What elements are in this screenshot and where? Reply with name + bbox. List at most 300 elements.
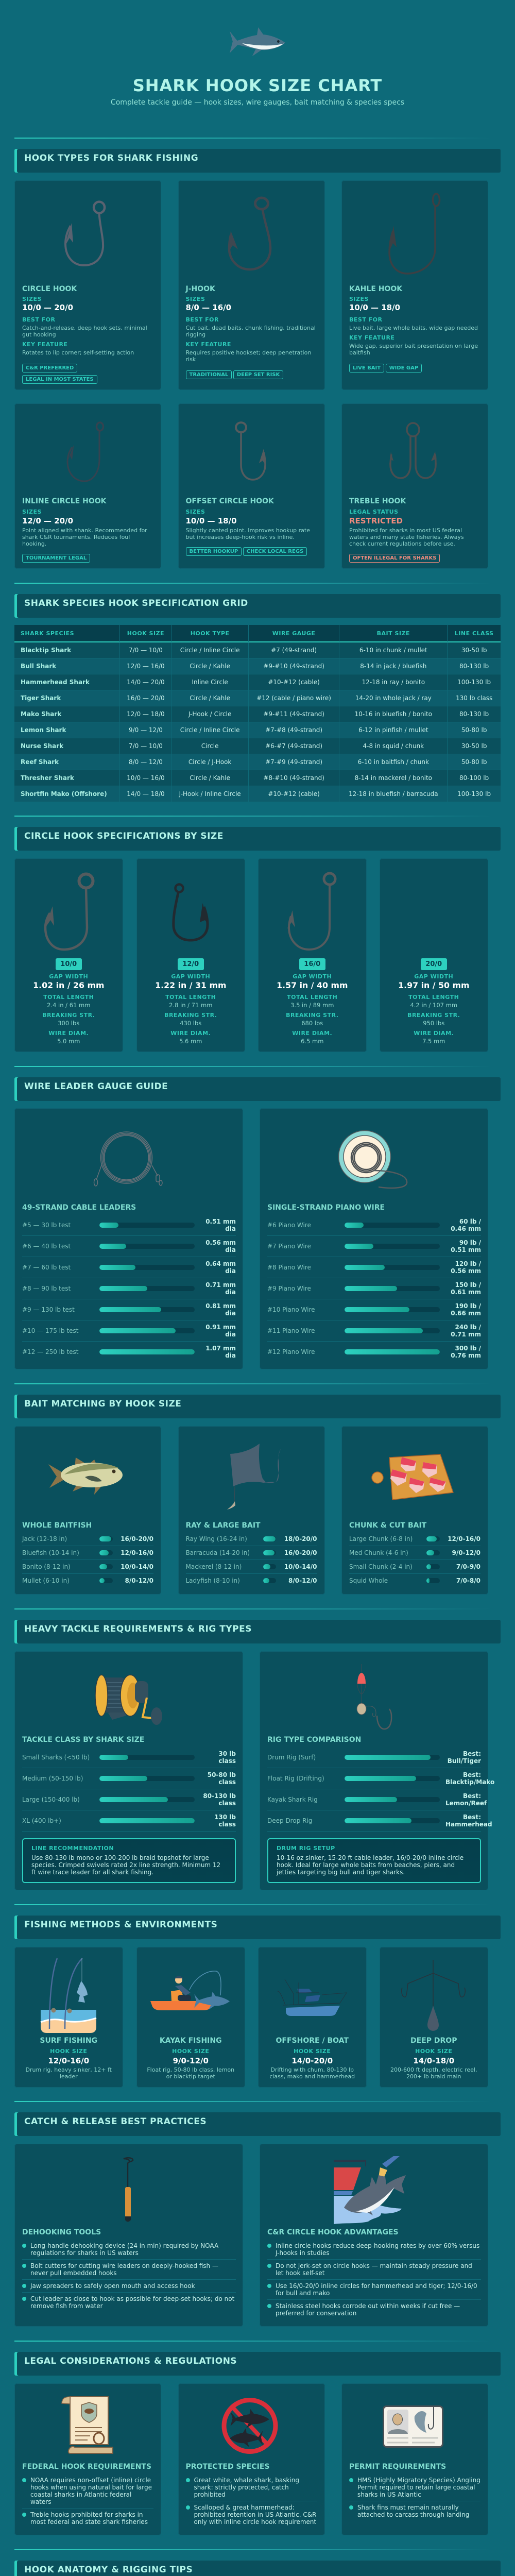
tags: C&R PREFERRED xyxy=(26,365,74,371)
list: Shark fins must remain naturally xyxy=(357,2504,459,2511)
heading: circle hook specs xyxy=(14,827,501,851)
table: species hook specs: Circle / Inline Circle xyxy=(180,726,239,734)
chart: piano wire gauges: #6 Piano Wire xyxy=(267,1221,311,1228)
panel: offshore boat: Drifting with chum, 80-130 lb xyxy=(270,2066,354,2073)
icon: cable coil xyxy=(94,1131,163,1187)
table: species hook specs: #9-#11 (49-strand) xyxy=(263,710,324,718)
panel: deep drop: 200-600 ft depth, electric reel, xyxy=(390,2066,477,2073)
list: most federal and state shark fisheries xyxy=(30,2518,148,2526)
specs: GAP WIDTH xyxy=(414,973,453,980)
panel: piano wire xyxy=(260,1108,488,1369)
specs: GAP WIDTH xyxy=(171,973,210,980)
list: Scalloped & great hammerhead: xyxy=(194,2504,295,2511)
chart: rig comparison: Best: Hammerhead xyxy=(445,1814,492,1828)
panel: chunk and cut bait xyxy=(341,1426,488,1595)
specs: HOOK SIZE xyxy=(294,2048,331,2055)
chart: baitfish sizes: Jack (12-18 in) xyxy=(22,1535,67,1543)
specs: SIZES xyxy=(22,509,42,515)
panel: circle hook: Rotates to lip corner; self-setting action xyxy=(22,349,134,356)
panel: 20/0: TOTAL LENGTH xyxy=(408,994,459,1001)
chart: large bait sizes: 18/0-20/0 xyxy=(284,1535,317,1543)
chart: baitfish sizes: Bonito (8-12 in) xyxy=(22,1563,71,1570)
chart: rig comparison: Deep Drop Rig xyxy=(267,1817,312,1824)
chart: rig comparison: Best: Lemon/Reef xyxy=(445,1792,487,1807)
heading: heavy tackle xyxy=(14,1620,501,1643)
panel: circle hook: KEY FEATURE xyxy=(22,341,67,348)
table: species hook specs: Lemon Shark xyxy=(21,726,66,734)
list: NOAA requires non-offset (inline) circle xyxy=(30,2477,151,2484)
callout: line recommendation: species. Crimped swivels rated 2x line strength. Minimum 12 xyxy=(31,1861,220,1869)
tags xyxy=(186,370,283,379)
table: species hook specs: Thresher Shark xyxy=(21,774,74,782)
panel: inline circle hook xyxy=(14,403,161,569)
heading: TACKLE CLASS BY SHARK SIZE xyxy=(22,1736,144,1744)
panel: 12/0: TOTAL LENGTH xyxy=(165,994,216,1001)
icon: deep drop rig xyxy=(401,1960,466,2031)
table: species hook specs: 7/0 — 10/0 xyxy=(129,647,163,654)
table: species hook specs: 9/0 — 12/0 xyxy=(129,726,163,734)
chart: tackle class: 130 lb class xyxy=(214,1814,236,1828)
panel: dehooking tools xyxy=(14,2144,243,2327)
chart: cable gauges: 0.91 mm dia xyxy=(205,1324,236,1338)
chart: large bait sizes: Ladyfish (8-10 in) xyxy=(185,1577,240,1584)
chart: tackle class: Small Sharks (<50 lb) xyxy=(22,1754,90,1761)
heading: hook types: HOOK TYPES FOR SHARK FISHING xyxy=(24,153,198,163)
callout: drum rig setup: 10-16 oz sinker, 15-20 ft cable leader, 16/0-20/0 inline circle xyxy=(277,1854,464,1861)
icon: j-hook xyxy=(228,197,272,271)
panel: 10/0: 2.4 in / 61 mm xyxy=(47,1002,90,1009)
specs: SIZES xyxy=(349,296,369,302)
list: J-hooks in studies xyxy=(276,2249,330,2257)
callout: drum rig setup xyxy=(267,1838,481,1883)
tags: BETTER HOOKUP xyxy=(190,549,238,554)
panel: 12/0: 2.8 in / 71 mm xyxy=(169,1002,212,1009)
chart: tackle class xyxy=(22,1750,236,1832)
chart: piano wire gauges: 300 lb / 0.76 mm xyxy=(451,1345,481,1359)
heading: TREBLE HOOK xyxy=(349,497,406,505)
icon: offset circle hook xyxy=(235,421,266,481)
list xyxy=(267,2240,481,2319)
table: species hook specs: 8/0 — 12/0 xyxy=(129,758,163,766)
table: species hook specs: 50-80 lb xyxy=(461,758,487,766)
heading: fishing methods xyxy=(14,1916,501,1939)
panel: deep drop xyxy=(380,1947,488,2088)
table: species hook specs: Inline Circle xyxy=(192,679,228,686)
heading: CHUNK & CUT BAIT xyxy=(349,1521,426,1530)
table: species hook specs: 100-130 lb xyxy=(457,790,491,798)
heading: catch and release xyxy=(14,2112,501,2136)
list: preferred for conservation xyxy=(276,2310,356,2317)
panel: offset circle hook xyxy=(178,403,324,569)
panel: federal hook requirements xyxy=(14,2383,161,2535)
chart: cable gauges xyxy=(22,1218,236,1359)
heading: FEDERAL HOOK REQUIREMENTS xyxy=(22,2463,151,2471)
chart: cable gauges: #10 — 175 lb test xyxy=(22,1327,78,1334)
specs: SIZES xyxy=(185,296,205,302)
table: species hook specs: J-Hook / Circle xyxy=(188,710,231,718)
icon: kahle hook xyxy=(388,193,441,275)
callout: drum rig setup: hook. Ideal for large whole baits from beaches, piers, and xyxy=(277,1861,455,1869)
table: species hook specs: 6-10 in baitfish / chunk xyxy=(358,758,429,766)
heading: anatomy and rigging: HOOK ANATOMY & RIGGING TIPS xyxy=(24,2565,193,2575)
list: attached to carcass through landing xyxy=(357,2511,469,2518)
chart: rig comparison: Float Rig (Drifting) xyxy=(267,1774,324,1782)
table: species hook specs: 8-14 in mackerel / bonito xyxy=(355,774,432,782)
table: species hook specs: Circle / Kahle xyxy=(190,663,230,670)
chart: cable gauges: 0.71 mm dia xyxy=(205,1281,236,1296)
heading: KAHLE HOOK xyxy=(349,285,402,293)
chart: rig comparison: Drum Rig (Surf) xyxy=(267,1754,316,1761)
chart: tackle class: 50-80 lb class xyxy=(208,1771,236,1786)
callout: drum rig setup: DRUM RIG SETUP xyxy=(277,1845,335,1852)
icon: 12/0 hook xyxy=(172,883,209,942)
list: HMS (Highly Migratory Species) Angling xyxy=(357,2477,480,2484)
panel: treble hook xyxy=(341,403,488,569)
panel: surf fishing: Drum rig, heavy sinker, 12+ ft xyxy=(26,2066,112,2073)
heading: C&R CIRCLE HOOK ADVANTAGES xyxy=(267,2228,399,2236)
table: species hook specs: #7-#8 (49-strand) xyxy=(265,726,322,734)
heading: INLINE CIRCLE HOOK xyxy=(22,497,106,505)
list xyxy=(22,2240,236,2312)
table: species hook specs: 8-14 in jack / bluefish xyxy=(360,663,426,670)
icon: inline circle hook xyxy=(67,421,104,482)
panel: protected species xyxy=(178,2383,324,2535)
icon: prohibited sharks xyxy=(221,2397,278,2454)
heading: PERMIT REQUIREMENTS xyxy=(349,2463,446,2471)
panel: kahle hook: Live bait, large whole baits, wide gap needed xyxy=(349,325,478,331)
panel: kahle hook: KEY FEATURE xyxy=(349,334,394,341)
list: Jaw spreaders to safely open mouth and access hook xyxy=(30,2282,195,2290)
table: species hook specs: 12-18 in ray / bonito xyxy=(362,679,425,686)
table: species hook specs: Reef Shark xyxy=(21,758,59,766)
heading: DEEP DROP xyxy=(410,2037,457,2045)
panel: 12/0 xyxy=(136,858,245,1052)
icon: circle hook xyxy=(64,200,106,266)
panel: rig types xyxy=(260,1651,488,1890)
specs: LEGAL STATUS xyxy=(349,509,399,515)
tags: CHECK LOCAL REGS xyxy=(247,549,303,554)
table: species hook specs: 7/0 — 10/0 xyxy=(129,742,163,750)
panel: 20/0 xyxy=(380,858,488,1052)
panel: circle hook: Catch-and-release, deep hook sets, minimal xyxy=(22,325,147,331)
table: species hook specs: #9-#10 (49-strand) xyxy=(263,663,324,670)
icon: surf rods xyxy=(40,1958,97,2033)
panel: 10/0: 1.02 in / 26 mm xyxy=(33,980,104,990)
chart: cable gauges: 0.64 mm dia xyxy=(205,1260,236,1275)
heading: circle hook specs: CIRCLE HOOK SPECIFICATIONS BY SIZE xyxy=(24,831,224,841)
panel: inline circle hook: hooking. xyxy=(22,540,46,547)
heading: wire leader xyxy=(14,1077,501,1101)
table: species hook specs: 12/0 — 16/0 xyxy=(127,663,165,670)
table: species hook specs: Bull Shark xyxy=(21,663,56,670)
table: species hook specs: 14/0 — 18/0 xyxy=(127,790,165,798)
list: sharks in US Atlantic xyxy=(357,2491,421,2498)
list: Use 16/0-20/0 inline circles for hammerhead and tiger; 12/0-16/0 xyxy=(276,2282,477,2290)
panel: j-hook: Cut bait, dead baits, chunk fishing, traditional xyxy=(185,325,316,331)
chart: chunk sizes: 7/0-8/0 xyxy=(456,1577,480,1584)
list xyxy=(185,2474,317,2528)
chart: cable gauges: #9 — 130 lb test xyxy=(22,1306,75,1313)
table: species hook specs: 80-100 lb xyxy=(459,774,489,782)
table: species hook specs: HOOK TYPE xyxy=(191,630,230,637)
chart: piano wire gauges: #12 Piano Wire xyxy=(267,1348,315,1355)
icon: cutting board xyxy=(371,1454,454,1500)
panel: j-hook: rigging xyxy=(185,331,205,338)
panel: 10/0: TOTAL LENGTH xyxy=(43,994,94,1001)
list: remove fish from water xyxy=(30,2302,103,2310)
tags: OFTEN ILLEGAL FOR SHARKS xyxy=(353,555,436,561)
panel: permit requirements xyxy=(341,2383,488,2535)
panel: 16/0: WIRE DIAM. xyxy=(292,1030,332,1037)
panel: offset circle hook: 10/0 — 18/0 xyxy=(185,516,237,526)
icon: shark release xyxy=(334,2156,406,2224)
panel: kayak fishing: or blacktip target xyxy=(166,2073,215,2079)
panel: 16/0: 3.5 in / 89 mm xyxy=(290,1002,334,1009)
chart: piano wire gauges: 60 lb / 0.46 mm xyxy=(451,1218,481,1232)
callout: line recommendation: Use 80-130 lb mono or 100-200 lb braid topshot for large xyxy=(31,1854,209,1861)
panel: 16/0: 1.57 in / 40 mm xyxy=(277,980,348,990)
chart: tackle class: Large (150-400 lb) xyxy=(22,1796,80,1803)
table: species hook specs: #7-#9 (49-strand) xyxy=(265,758,322,766)
specs: HOOK SIZE xyxy=(172,2048,209,2055)
heading: species grid: SHARK SPECIES HOOK SPECIFICATION GRID xyxy=(24,598,248,608)
table: species hook specs: 30-50 lb xyxy=(461,647,487,654)
chart: cable gauges: #7 — 60 lb test xyxy=(22,1263,71,1270)
panel: j-hook xyxy=(178,180,324,390)
table: species hook specs: #12 (cable / piano wire) xyxy=(256,694,331,702)
table: species hook specs: 30-50 lb xyxy=(461,742,487,750)
heading: WHOLE BAITFISH xyxy=(22,1521,92,1530)
table: species hook specs: 50-80 lb xyxy=(461,726,487,734)
panel: 20/0: 1.97 in / 50 mm xyxy=(398,980,469,990)
tags xyxy=(349,364,422,372)
panel: kahle hook xyxy=(341,180,488,390)
panel: 10/0: WIRE DIAM. xyxy=(48,1030,89,1037)
chart: piano wire gauges: #11 Piano Wire xyxy=(267,1327,315,1334)
chart: piano wire gauges: 120 lb / 0.56 mm xyxy=(451,1260,481,1275)
chart: large bait sizes: Barracuda (14-20 in) xyxy=(185,1549,250,1556)
table: species hook specs: Tiger Shark xyxy=(21,694,61,702)
panel: 10/0 xyxy=(14,858,123,1052)
tags xyxy=(186,547,307,556)
heading: RIG TYPE COMPARISON xyxy=(267,1736,361,1744)
chart: baitfish sizes: 12/0-16/0 xyxy=(121,1549,153,1556)
chart: tackle class: 30 lb class xyxy=(218,1750,236,1765)
panel: j-hook: 8/0 — 16/0 xyxy=(185,303,231,312)
panel: circle hook: LEGAL IN MOST STATES xyxy=(26,377,94,382)
panel: 12/0: BREAKING STR. xyxy=(164,1012,217,1019)
table: species hook specs: 16/0 — 20/0 xyxy=(127,694,165,702)
panel: surf fishing xyxy=(14,1947,123,2088)
chart: chunk sizes xyxy=(349,1535,480,1584)
chart: baitfish sizes xyxy=(22,1535,153,1584)
panel: circle hook: 10/0 — 20/0 xyxy=(22,303,73,312)
icon: dehooker xyxy=(124,2157,134,2222)
icon: drum rig xyxy=(356,1664,392,1730)
heading: hook types xyxy=(14,149,501,173)
panel: inline circle hook: shark C&R tournaments. Reduces foul xyxy=(22,534,130,540)
tags: DEEP SET RISK xyxy=(237,372,280,378)
panel: j-hook: risk xyxy=(185,356,196,363)
table: species hook specs: #7 (49-strand) xyxy=(271,647,317,654)
chart: chunk sizes: Small Chunk (2-4 in) xyxy=(349,1563,413,1570)
table: species hook specs: SHARK SPECIES xyxy=(21,630,74,637)
panel: j-hook: KEY FEATURE xyxy=(185,341,231,348)
specs: SIZES xyxy=(185,509,205,515)
panel: 12/0: WIRE DIAM. xyxy=(170,1030,211,1037)
list: Cut leader as close to hook as possible for deep-set hooks; do not xyxy=(30,2295,234,2302)
size badge: 16/0 xyxy=(304,960,320,968)
table: species hook specs: 100-130 lb xyxy=(457,679,491,686)
heading: DEHOOKING TOOLS xyxy=(22,2228,101,2236)
chart: rig comparison: Best: Bull/Tiger xyxy=(448,1750,481,1765)
table: species hook specs: 6-12 in pinfish / mullet xyxy=(358,726,428,734)
icon: ray xyxy=(228,1444,281,1510)
table: species hook specs: 14-20 in whole jack / ray xyxy=(355,694,432,702)
panel: circle hook xyxy=(14,180,161,390)
specs: GAP WIDTH xyxy=(293,973,332,980)
list: prohibited retention in US Atlantic. C&R xyxy=(194,2511,316,2518)
panel: j-hook: Requires positive hookset; deep penetration xyxy=(185,349,311,356)
title: SHARK HOOK SIZE CHART xyxy=(133,76,382,95)
list: Bolt cutters for cutting wire leaders on deeply-hooked fish — xyxy=(30,2262,218,2269)
heading: OFFSHORE / BOAT xyxy=(276,2037,349,2045)
panel: offshore boat: 14/0-20/0 xyxy=(291,2056,333,2065)
panel: 20/0: 7.5 mm xyxy=(422,1038,445,1045)
panel: deep drop: 200+ lb braid main xyxy=(406,2073,461,2079)
panel: 16/0: 6.5 mm xyxy=(301,1038,323,1045)
list xyxy=(349,2474,480,2521)
heading: wire leader: WIRE LEADER GAUGE GUIDE xyxy=(24,1081,168,1092)
table: species hook specs: J-Hook / Inline Circle xyxy=(179,790,241,798)
panel: deep drop: 14/0-18/0 xyxy=(413,2056,454,2065)
table: species hook specs: #10-#12 (cable) xyxy=(268,790,320,798)
list: Permit required to retain large coastal xyxy=(357,2484,475,2491)
panel: tackle class xyxy=(14,1651,243,1890)
heading: CIRCLE HOOK xyxy=(22,285,77,293)
chart: piano wire gauges: #7 Piano Wire xyxy=(267,1243,311,1250)
table: species hook specs xyxy=(14,625,501,802)
chart: cable gauges: 0.81 mm dia xyxy=(205,1302,236,1317)
tags: TRADITIONAL xyxy=(190,372,228,378)
heading: heavy tackle: HEAVY TACKLE REQUIREMENTS & RIG TYPES xyxy=(24,1624,252,1634)
table: species hook specs: 14/0 — 20/0 xyxy=(127,679,165,686)
table: species hook specs: 80-130 lb xyxy=(459,710,489,718)
callout: line recommendation xyxy=(22,1838,236,1883)
list: Stainless steel hooks corrode out within weeks if cut free — xyxy=(276,2302,460,2310)
chart: cable gauges: #12 — 250 lb test xyxy=(22,1348,78,1355)
table: species hook specs: #6-#7 (49-strand) xyxy=(265,742,322,750)
panel: 16/0: TOTAL LENGTH xyxy=(287,994,337,1001)
tags: WIDE GAP xyxy=(389,365,418,371)
panel: kayak fishing xyxy=(136,1947,245,2088)
table: species hook specs: HOOK SIZE xyxy=(127,630,164,637)
table: species hook specs: 10-16 in bluefish / bonito xyxy=(355,710,432,718)
table: species hook specs: Circle / J-Hook xyxy=(188,758,231,766)
table: species hook specs: Circle xyxy=(201,742,218,750)
list: coastal sharks in Atlantic federal xyxy=(30,2491,131,2498)
specs: SIZES xyxy=(22,296,42,302)
panel: inline circle hook: Point aligned with shank. Recommended for xyxy=(22,527,147,534)
panel: offset circle hook: Slightly canted point. Improves hookup rate xyxy=(185,527,310,534)
chart: large bait sizes: Ray Wing (16-24 in) xyxy=(185,1535,247,1543)
panel: treble hook: waters and many state fisheries. Always xyxy=(349,534,464,540)
list: prohibited xyxy=(194,2491,226,2498)
list: Inline circle hooks reduce deep-hooking rates by over 60% versus xyxy=(276,2242,479,2249)
table: species hook specs: 80-130 lb xyxy=(459,663,489,670)
panel: ray and large bait xyxy=(178,1426,324,1595)
list: regulations for sharks in US waters xyxy=(30,2249,139,2257)
table: species hook specs: Hammerhead Shark xyxy=(21,679,90,686)
chart: cable gauges: #8 — 90 lb test xyxy=(22,1285,71,1292)
panel: kayak fishing: Float rig, 50-80 lb class, lemon xyxy=(147,2066,234,2073)
table: species hook specs: Mako Shark xyxy=(21,710,61,718)
panel: 20/0: BREAKING STR. xyxy=(407,1012,460,1019)
chart: large bait sizes: 16/0-20/0 xyxy=(284,1549,317,1556)
table: species hook specs: #8-#10 (49-strand) xyxy=(263,774,324,782)
table: species hook specs: Blacktip Shark xyxy=(21,647,71,654)
list: Long-handle dehooking device (24 in min) required by NOAA xyxy=(30,2242,218,2249)
list: shark: strictly protected, catch xyxy=(194,2484,289,2491)
icon: 16/0 hook xyxy=(287,872,337,951)
chart: chunk sizes: Squid Whole xyxy=(349,1577,388,1584)
table: species hook specs: Circle / Kahle xyxy=(190,774,230,782)
heading: bait matching: BAIT MATCHING BY HOOK SIZE xyxy=(24,1399,181,1409)
list xyxy=(22,2474,153,2528)
callout: line recommendation: ft wire trace leader for all shark fishing. xyxy=(31,1869,153,1876)
chart: baitfish sizes: Mullet (6-10 in) xyxy=(22,1577,70,1584)
panel: surf fishing: 12/0-16/0 xyxy=(48,2056,89,2065)
chart: cable gauges: #5 — 30 lb test xyxy=(22,1221,71,1228)
list: Treble hooks prohibited for sharks in xyxy=(30,2511,143,2518)
icon: wire spool xyxy=(338,1130,408,1189)
icon: kayak with angler xyxy=(150,1971,230,2010)
panel: kahle hook: Wide gap, superior bait presentation on large xyxy=(349,343,478,349)
table: species hook specs: WIRE GAUGE xyxy=(272,630,315,637)
chart: piano wire gauges: 150 lb / 0.61 mm xyxy=(451,1281,481,1296)
chart: baitfish sizes: 8/0-12/0 xyxy=(125,1577,153,1584)
tags: LIVE BAIT xyxy=(353,365,381,371)
chart: piano wire gauges xyxy=(267,1218,481,1359)
panel: 20/0: 4.2 in / 107 mm xyxy=(410,1002,457,1009)
chart: rig comparison xyxy=(267,1750,494,1832)
panel: 12/0: 1.22 in / 31 mm xyxy=(155,980,226,990)
specs: HOOK SIZE xyxy=(415,2048,452,2055)
chart: tackle class: 80-130 lb class xyxy=(203,1792,236,1807)
list: only with inline circle hook requirement xyxy=(194,2518,316,2526)
panel: 16/0: 680 lbs xyxy=(301,1019,323,1026)
heading: fishing methods: FISHING METHODS & ENVIRONMENTS xyxy=(24,1920,217,1930)
heading: 49-STRAND CABLE LEADERS xyxy=(22,1204,136,1212)
list: waters xyxy=(30,2498,51,2505)
size badge: 20/0 xyxy=(425,960,442,968)
table: species hook specs: LINE CLASS xyxy=(455,630,493,637)
panel: surf fishing: leader xyxy=(60,2073,78,2079)
chart: piano wire gauges: 90 lb / 0.51 mm xyxy=(451,1239,481,1253)
icon: fishing reel xyxy=(95,1674,162,1725)
panel: kahle hook: baitfish xyxy=(349,349,370,356)
subtitle: Complete tackle guide — hook sizes, wire gauges, bait matching & species specs xyxy=(111,98,404,107)
chart: baitfish sizes: Bluefish (10-14 in) xyxy=(22,1549,79,1556)
list: let hook self-set xyxy=(276,2269,324,2277)
chart: cable gauges: 0.51 mm dia xyxy=(205,1218,236,1232)
heading: species grid xyxy=(14,594,501,618)
icon: permit card xyxy=(383,2405,443,2448)
panel: cable leaders xyxy=(14,1108,243,1369)
table: species hook specs: 130 lb class xyxy=(456,694,492,702)
table: species hook specs: 6-10 in chunk / mullet xyxy=(359,647,427,654)
panel: 12/0: 430 lbs xyxy=(180,1019,201,1026)
